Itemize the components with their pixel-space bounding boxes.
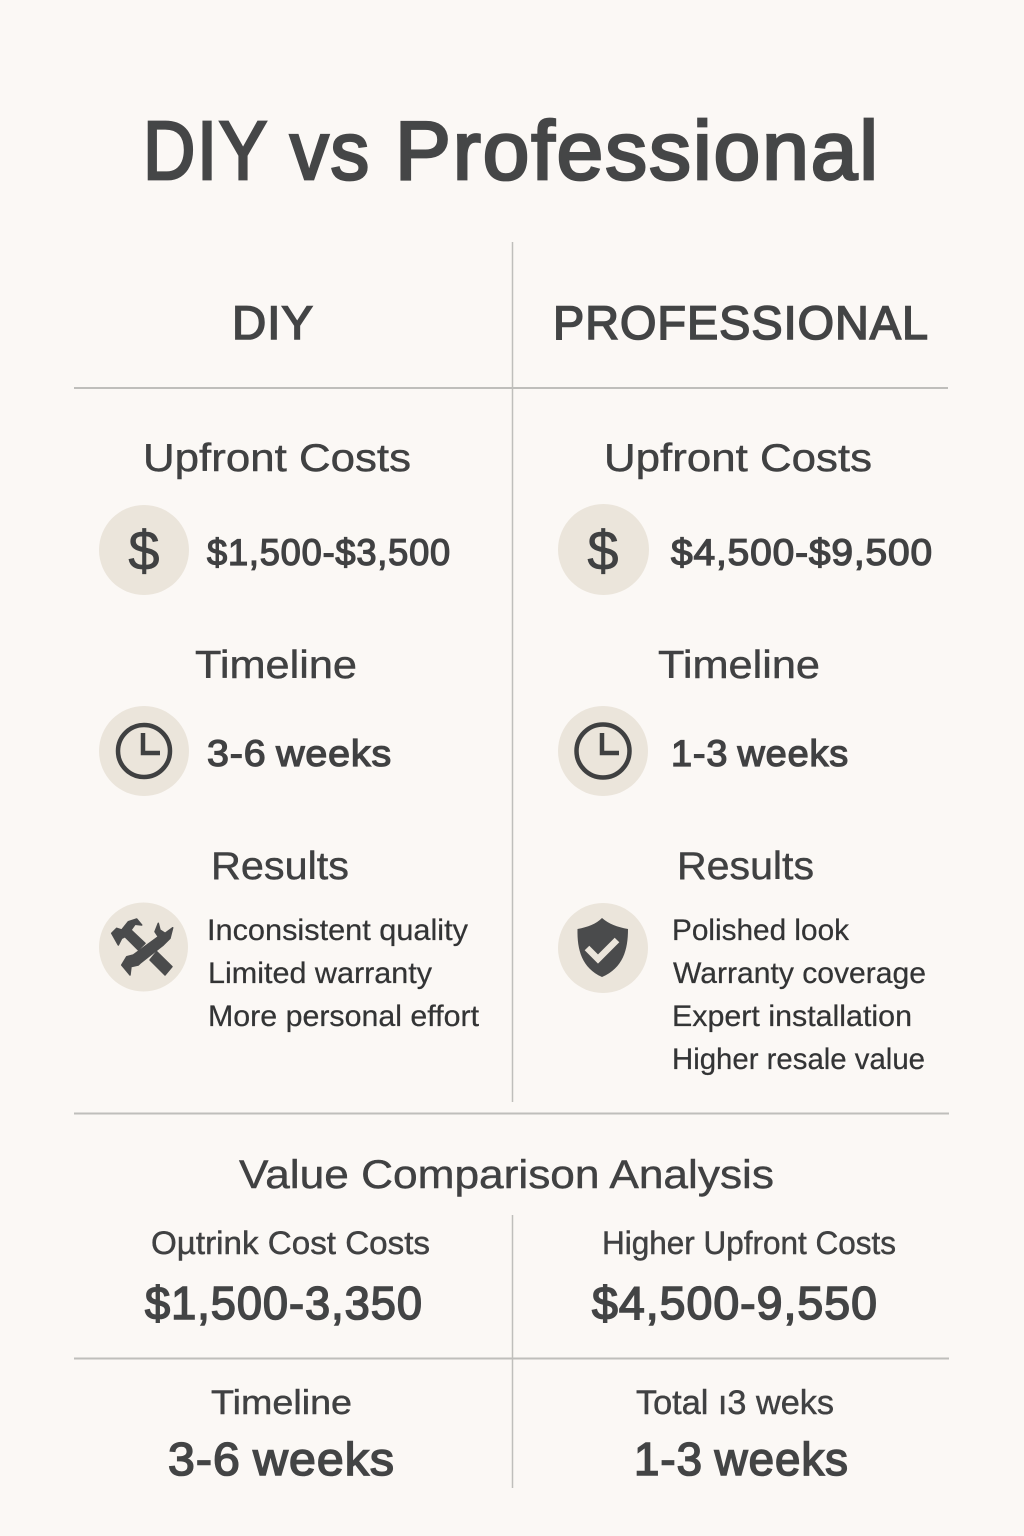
Professional timeline figure: 1-3 weeks (634, 1433, 849, 1485)
Professional cost value: $4,500-$9,500 (671, 532, 933, 573)
Professional timeline label: Timeline (658, 644, 820, 687)
DIY results list: More personal effort (208, 1000, 480, 1033)
Professional results list: Expert installation (672, 1000, 912, 1033)
title: DIY (143, 104, 269, 197)
Professional cost figure: $4,500-9,550 (592, 1277, 878, 1329)
title: Professional (395, 104, 880, 197)
Professional results list: Higher resale value (672, 1043, 925, 1076)
icon: dollar (99, 505, 189, 595)
heading: DIY: DIY (232, 296, 314, 349)
Professional results list: Warranty coverage (673, 957, 926, 990)
DIY upfront costs label: Upfront Costs (143, 437, 411, 480)
icon: dollar (558, 504, 649, 595)
section heading: Value Comparison Analysis (239, 1153, 774, 1197)
Professional results list: Polished look (672, 914, 850, 947)
DIY results list (207, 914, 480, 1033)
icon: clock (558, 706, 648, 796)
DIY timeline label: Timeline (211, 1384, 352, 1422)
DIY timeline figure: 3-6 weeks (168, 1433, 395, 1485)
DIY timeline value: 3-6 weeks (207, 733, 392, 774)
heading: PROFESSIONAL: PROFESSIONAL (553, 296, 929, 349)
DIY cost value: $1,500-$3,500 (207, 532, 451, 573)
Professional results list (672, 914, 926, 1076)
icon: shield with check (558, 903, 648, 993)
Professional upfront costs label: Upfront Costs (604, 437, 872, 480)
panel: value comparison analysis (145, 1153, 896, 1485)
icon: clock (99, 706, 189, 796)
DIY timeline label: Timeline (195, 644, 357, 687)
DIY results list: Limited warranty (208, 957, 432, 990)
Professional results label: Results (677, 845, 814, 888)
Professional cost label: Higher Upfront Costs (602, 1225, 896, 1261)
Professional timeline label: Total ı3 weks (636, 1384, 834, 1422)
DIY results list: Inconsistent quality (207, 914, 468, 947)
DIY cost label: Oµtrink Cost Costs (151, 1225, 430, 1261)
icon: dollar: $ (128, 519, 160, 582)
panel: DIY column (99, 296, 480, 1033)
title (143, 104, 880, 197)
icon: dollar: $ (587, 519, 619, 582)
DIY results label: Results (211, 845, 349, 888)
icon: hammer and wrench (99, 902, 188, 992)
panel: Professional column (553, 296, 933, 1076)
DIY cost figure: $1,500-3,350 (145, 1277, 423, 1329)
Professional timeline value: 1-3 weeks (671, 733, 849, 774)
title: vs (290, 104, 371, 197)
